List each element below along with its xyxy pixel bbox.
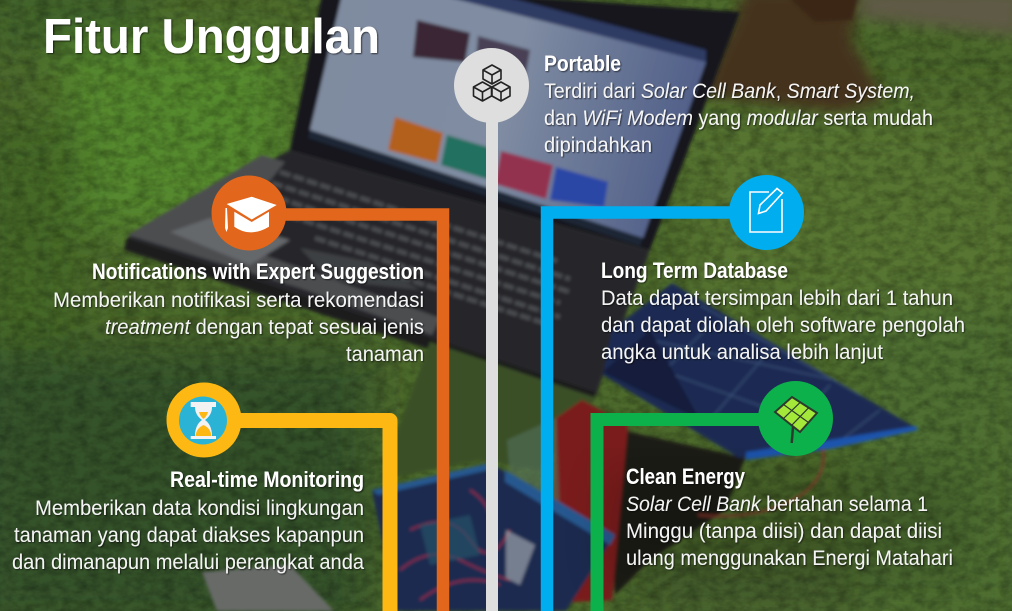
text: Long Term Database: Data dapat tersimpan lebih dari 1 tahun <box>601 286 953 310</box>
text: Clean Energy: Clean Energy <box>626 464 746 489</box>
darkening behind lower panel text <box>605 470 965 580</box>
timeline: yellow line and circle <box>166 382 390 611</box>
timeline: green line and circle <box>597 381 833 611</box>
base <box>127 150 650 395</box>
text: Portable: dipindahkan <box>544 133 652 157</box>
shadow beneath panel <box>600 425 745 595</box>
timeline: blue line and circle <box>547 175 804 611</box>
text: Long Term Database: dan dapat diolah oleh software pengolah <box>601 313 965 337</box>
icon: solar panel <box>775 397 817 443</box>
timeline: portable gray line and circle <box>454 48 529 611</box>
solar panel <box>603 283 916 458</box>
text: Clean Energy: Solar Cell Bank bertahan selama 1 <box>626 492 928 516</box>
icon: hourglass <box>191 402 216 439</box>
icon: note and pencil <box>750 188 782 232</box>
text: Long Term Database: Long Term Database <box>601 258 788 283</box>
grass below base <box>380 342 596 480</box>
icon: cubes <box>474 65 510 101</box>
icon: graduation cap <box>225 197 277 232</box>
text: Real-time Monitoring <box>12 467 364 574</box>
circuit box <box>372 463 615 611</box>
text: Clean Energy: ulang menggunakan Energi Matahari <box>626 546 953 570</box>
text: Notifications with Expert Suggestion: Notifications with Expert Suggestion <box>92 259 424 284</box>
text: Portable: Terdiri dari Solar Cell Bank, Smart System, <box>544 79 915 103</box>
text: Portable <box>544 51 933 157</box>
text: Notifications with Expert Suggestion: Memberikan notifikasi serta rekomendasi <box>53 288 424 312</box>
text: Long Term Database: angka untuk analisa lebih lanjut <box>601 340 883 364</box>
text: Notifications with Expert Suggestion: treatment dengan tepat sesuai jenis <box>105 315 424 339</box>
title: Fitur Unggulan <box>43 10 380 64</box>
text: Real-time Monitoring: tanaman yang dapat diakses kapanpun <box>14 523 364 547</box>
text: Real-time Monitoring: Memberikan data kondisi lingkungan <box>35 496 364 520</box>
text: Real-time Monitoring: Real-time Monitoring <box>170 467 364 492</box>
text: Portable: dan WiFi Modem yang modular serta mudah <box>544 106 933 130</box>
text: Real-time Monitoring: dan dimanapun melalui perangkat anda <box>12 550 364 574</box>
timeline: orange line and circle <box>212 176 443 611</box>
text: Notifications with Expert Suggestion <box>53 259 424 366</box>
text: Portable: Portable <box>544 51 621 76</box>
text: Clean Energy <box>626 464 953 570</box>
text: Long Term Database <box>601 258 965 364</box>
text: Clean Energy: Minggu (tanpa diisi) dan dapat diisi <box>626 519 942 543</box>
text: Notifications with Expert Suggestion: tanaman <box>346 342 424 366</box>
lid <box>290 0 740 250</box>
red container <box>553 400 628 602</box>
